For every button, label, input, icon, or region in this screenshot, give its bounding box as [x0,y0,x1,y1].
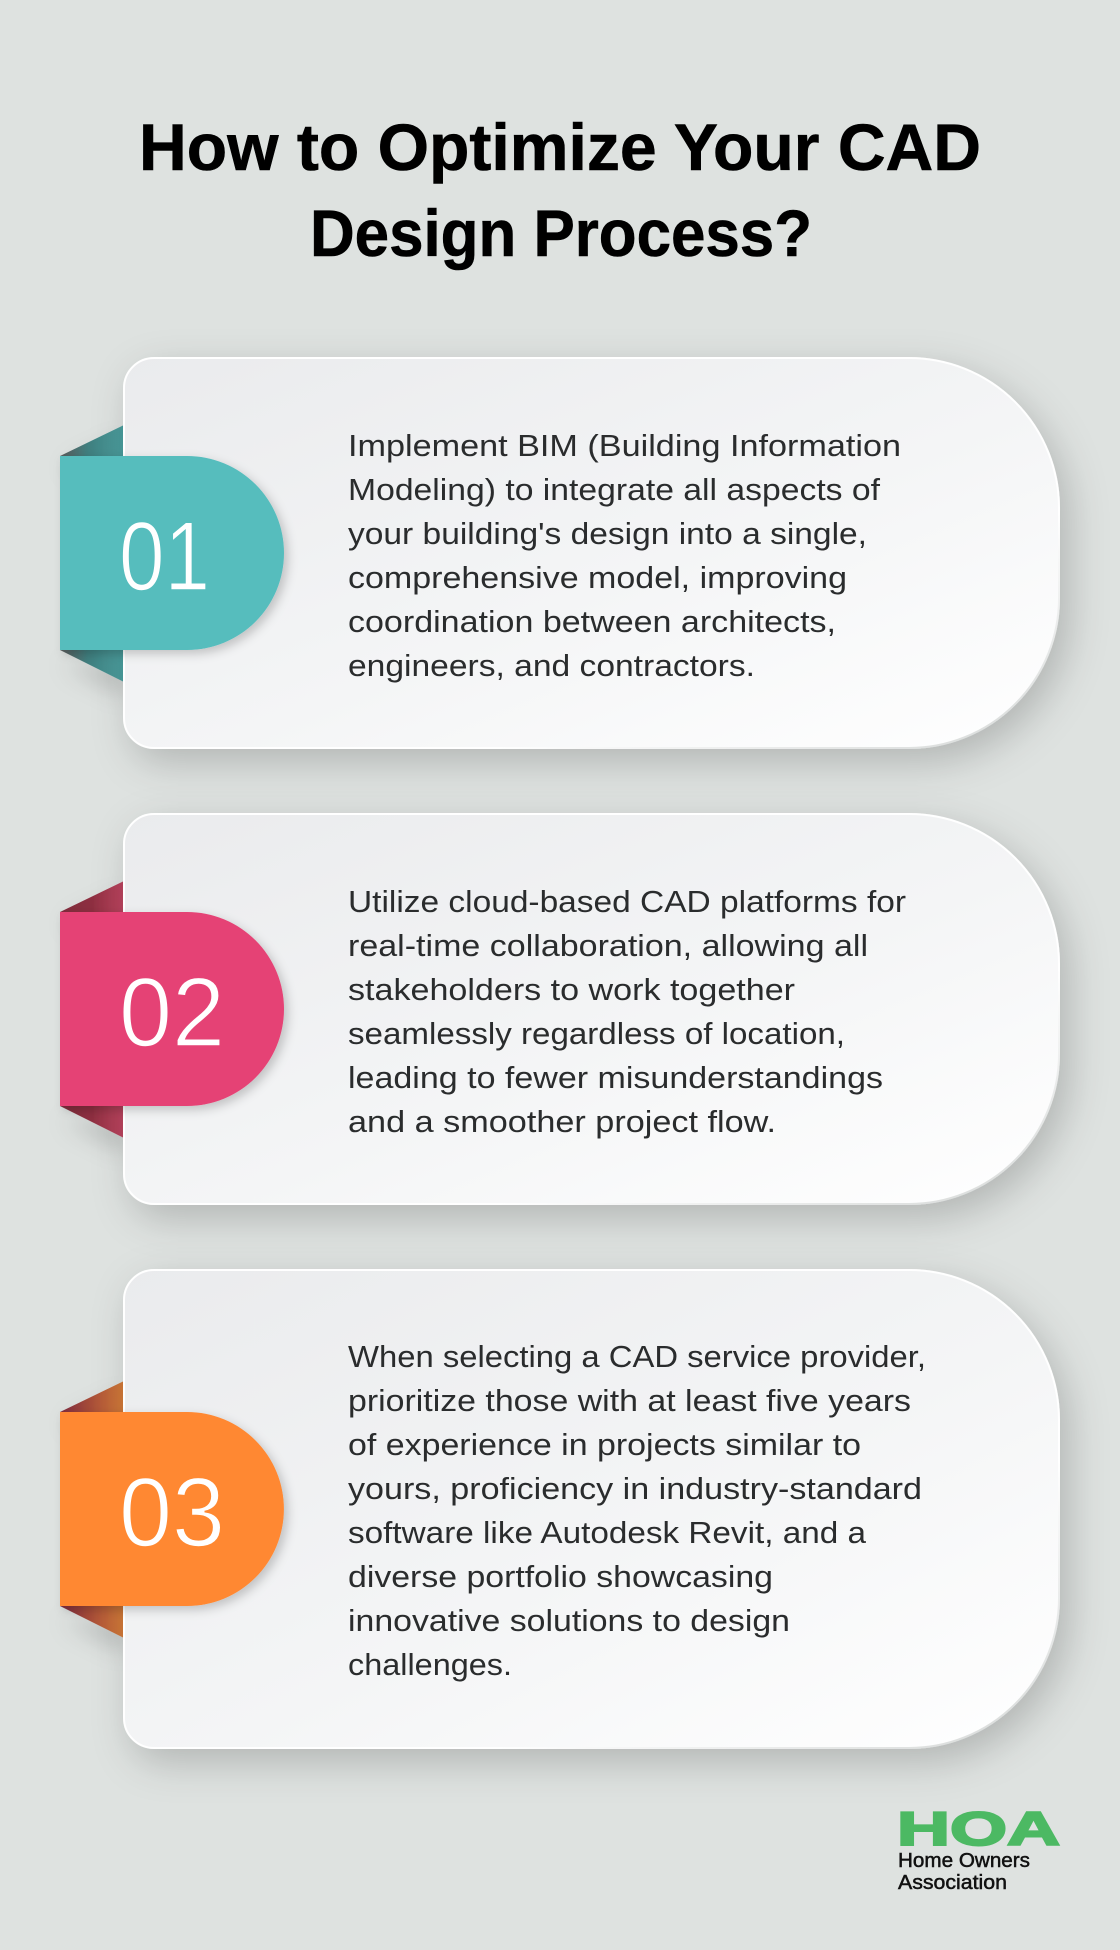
card 03 background [124,1270,1059,1748]
icon: teal ribbon folds [60,425,124,682]
text block 03: innovative solutions to design [348,1603,790,1638]
panel: step 01 [60,358,1059,748]
text block 02: and a smoother project flow. [348,1104,776,1139]
text block 03: diverse portfolio showcasing [348,1559,773,1594]
text block 03: challenges. [348,1647,512,1682]
text block 01: engineers, and contractors. [348,648,755,683]
text block 01: comprehensive model, improving [348,560,847,595]
number 02: 02 [119,957,225,1067]
number 03: 03 [119,1457,225,1567]
text block 02: seamlessly regardless of location, [348,1016,845,1051]
card 01 background [124,358,1059,748]
text block 01: coordination between architects, [348,604,836,639]
title: How to Optimize Your CAD [139,110,981,184]
text block 03: of experience in projects similar to [348,1427,861,1462]
logo: HOA Home Owners Association [897,1802,1060,1894]
text block 03: prioritize those with at least five years [348,1383,911,1418]
number badge 02 [60,912,284,1106]
text block 02: real-time collaboration, allowing all [348,928,868,963]
logo: HOA Home Owners Association: Home Owners [898,1850,1030,1872]
text block 03: When selecting a CAD service provider, [348,1339,926,1374]
card 02 background [124,814,1059,1204]
number badge 01 [60,456,284,650]
text block 01: Modeling) to integrate all aspects of [348,472,880,507]
title [139,110,981,270]
text block 02: Utilize cloud-based CAD platforms for [348,884,906,919]
number 01: 01 [119,501,210,611]
text block 03: yours, proficiency in industry-standard [348,1471,922,1506]
text block 03: software like Autodesk Revit, and a [348,1515,867,1550]
panel: step 03 [60,1270,1059,1748]
icon: pink ribbon folds [60,881,124,1138]
icon: orange ribbon folds [60,1381,124,1638]
text block 01: Implement BIM (Building Information [348,428,901,463]
text block 03 [348,1339,926,1682]
logo: HOA Home Owners Association: HOA [897,1802,1060,1855]
text block 02: leading to fewer misunderstandings [348,1060,883,1095]
text block 02: stakeholders to work together [348,972,795,1007]
logo: HOA Home Owners Association: Association [898,1872,1007,1894]
panel: step 02 [60,814,1059,1204]
title: Design Process? [310,196,812,270]
text block 01: your building's design into a single, [348,516,867,551]
number badge 03 [60,1412,284,1606]
text block 01 [348,428,901,683]
text block 02 [348,884,906,1139]
